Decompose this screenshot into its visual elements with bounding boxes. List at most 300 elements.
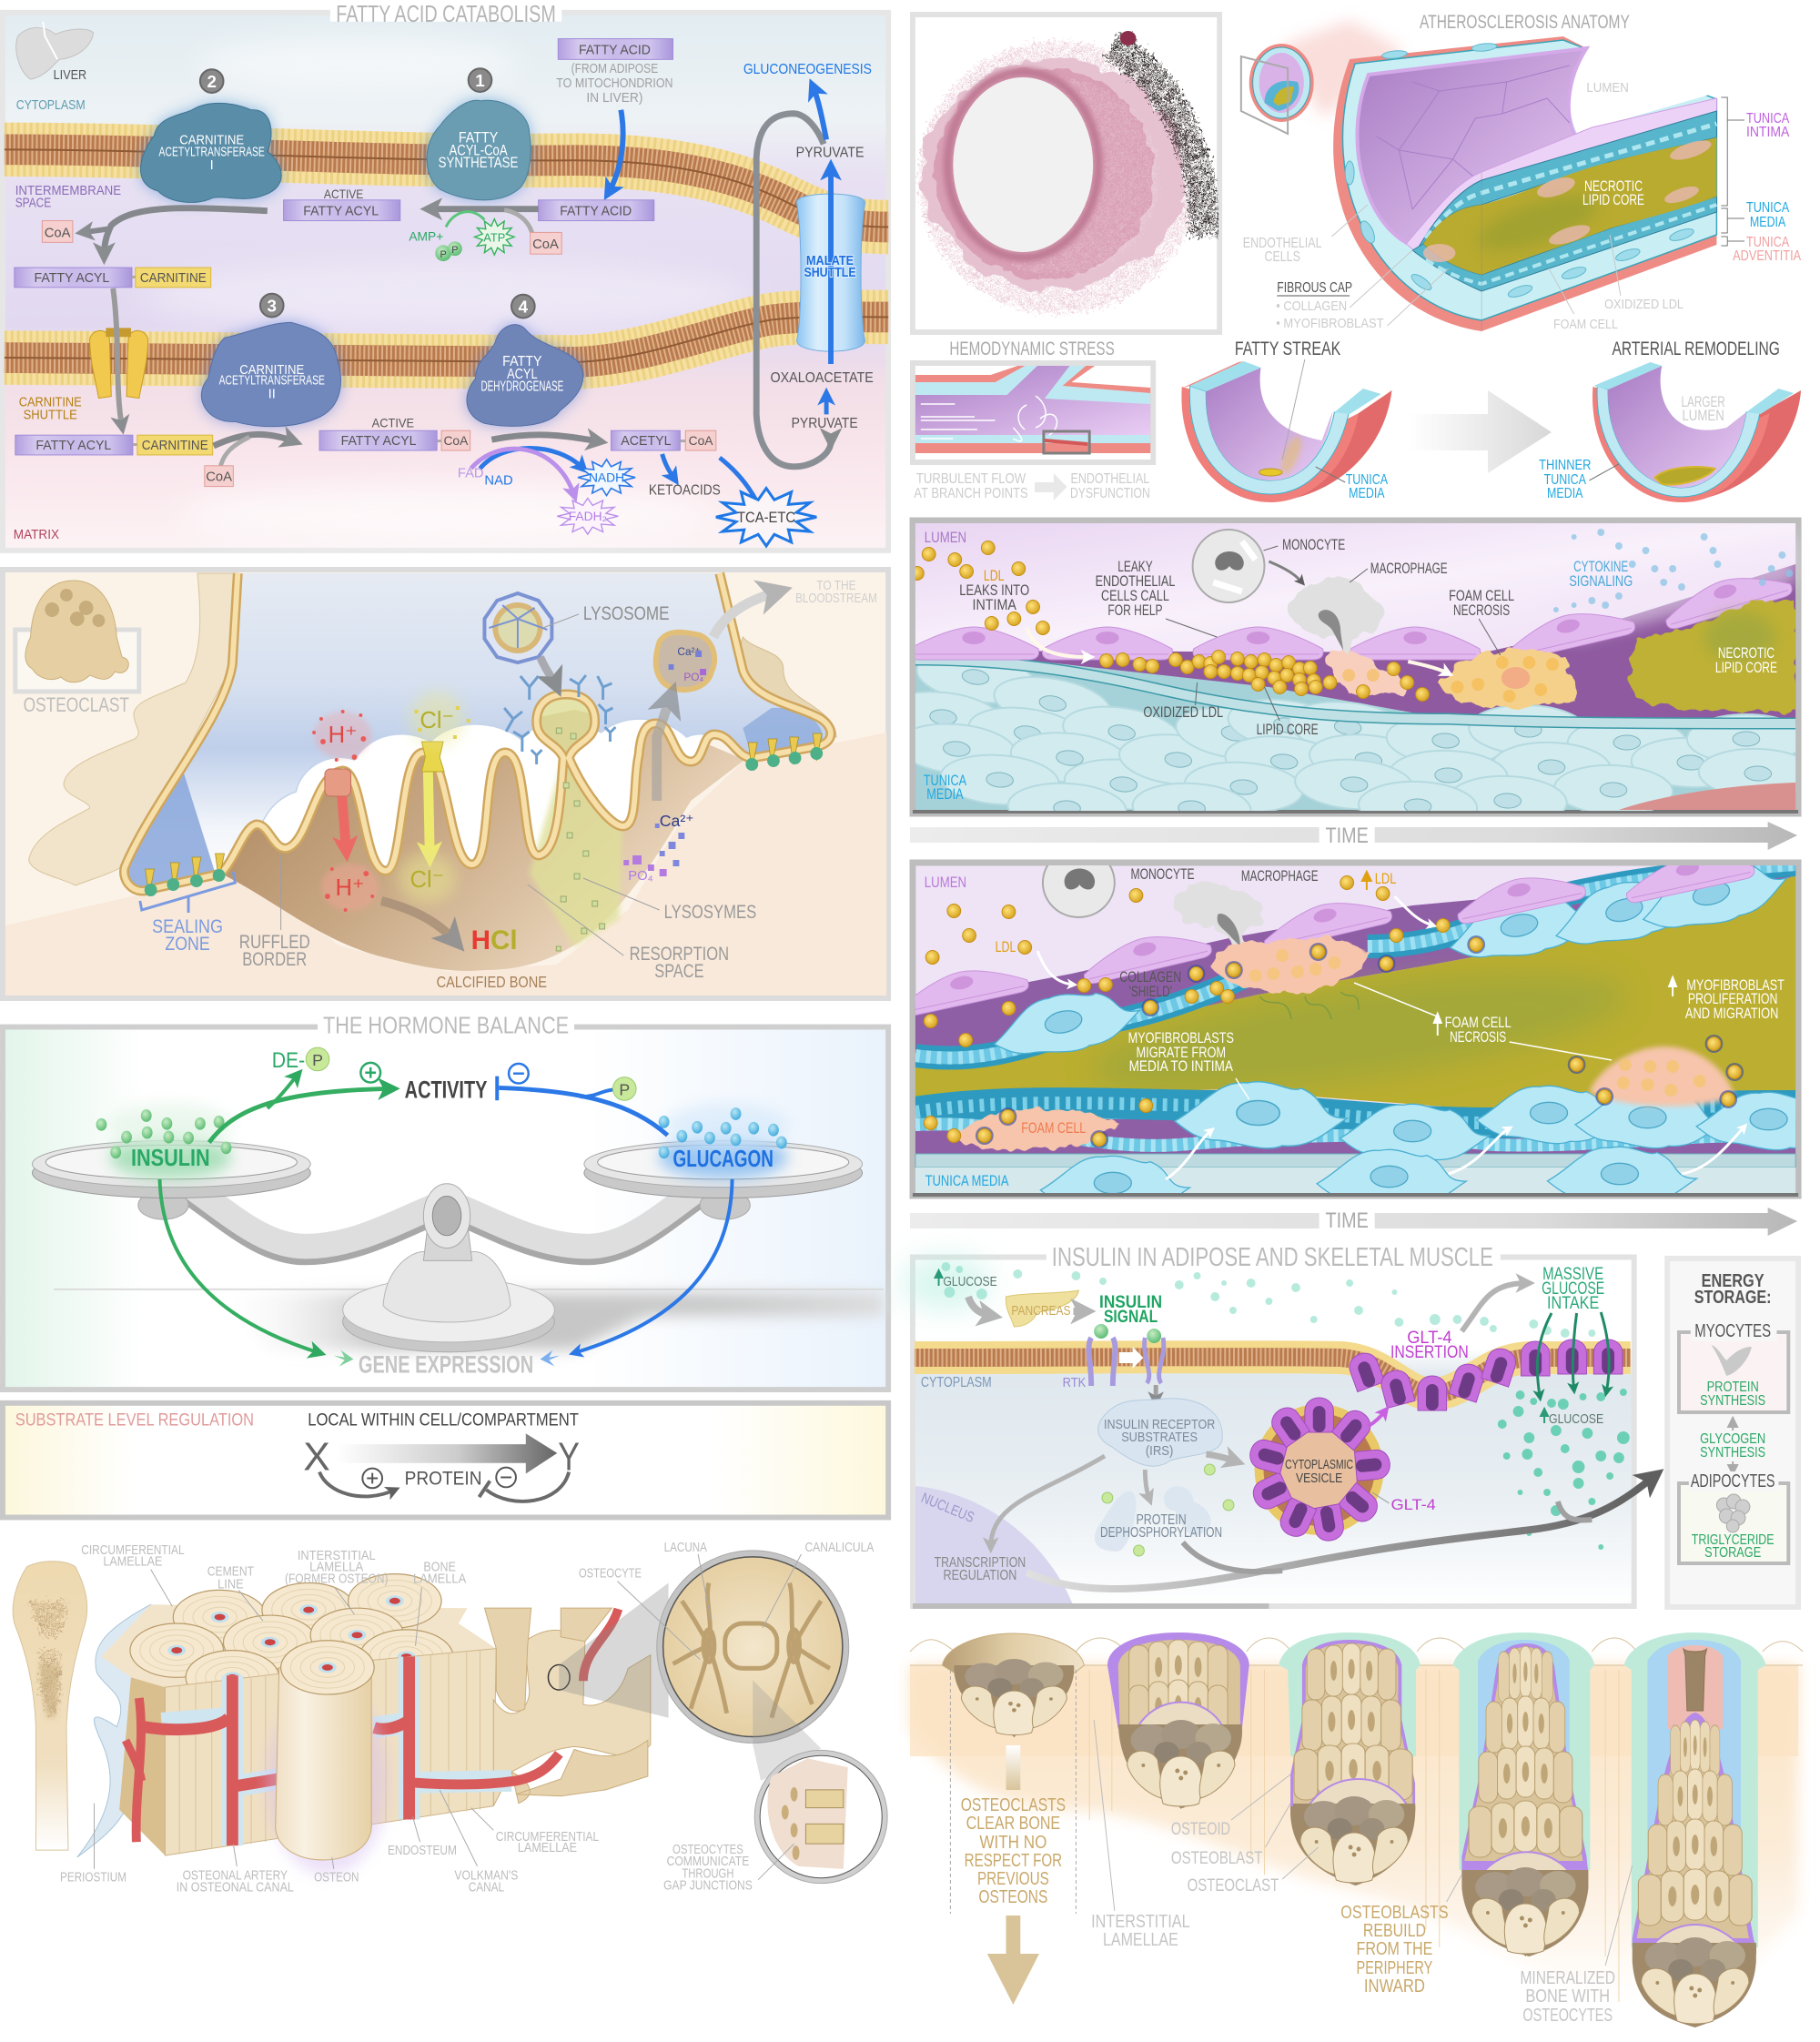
text: osteoclasts clear bone: OSTEONS [978,1887,1047,1907]
burst: FADH2 [557,498,618,534]
enzyme 1: fatty acyl-CoA synthetase: FATTY [459,128,498,146]
label: glycogen synthesis: GLYCOGEN [1700,1431,1765,1447]
foam cell upper [1211,938,1368,1019]
heading: STORAGE: [1694,1288,1772,1308]
number badge 4: 4 [519,297,529,317]
label: tunica media [1746,200,1790,230]
labels: INTIMA [973,596,1016,613]
blue arc to gene expression [574,1179,733,1353]
column 2 [1107,1633,1249,1809]
ion cloud: Cl- upper: Cl⁻ [420,708,454,733]
label: thinner tunica media: TUNICA [1544,472,1586,488]
enzyme 2: carnitine acetyltransferase I [140,103,281,202]
box: active fatty acyl: FATTY ACYL [303,205,379,219]
label: glucagon: GLUCAGON [673,1147,774,1172]
lumen [1357,48,1586,246]
fibrous cap band upper [1415,111,1716,253]
left column [3,2,888,1895]
labels: MEDIA TO INTIMA [1129,1057,1234,1075]
ions: calcium and phosphate in pit: Ca²⁺ [660,812,694,830]
labels: MACROPHAGE [1241,867,1319,885]
label: glt-4 insertion [1390,1328,1469,1361]
bone labels: CANAL [469,1881,504,1895]
panel: fatty acid catabolism [3,2,888,551]
letters X Y: Y [558,1436,580,1480]
arrow: coa branch [221,437,249,466]
labels: OXIDIZED LDL [1143,703,1223,721]
carnitine shuttle channel [90,328,148,399]
label: transcription regulation [935,1555,1026,1583]
ion cloud: H+ upper [312,710,371,762]
media layer [915,1168,1795,1193]
box: active fatty acyl [284,187,400,221]
phosphate small icons [1102,1464,1234,1556]
text: osteoblasts rebuild: INWARD [1364,1976,1425,1997]
labels: LDL [996,938,1016,955]
arrow: time 2: TIME [1326,1208,1369,1233]
arrow through shuttle [113,288,122,427]
bone labels: CANALICULA [804,1541,874,1555]
endothelial cell outlines [1377,66,1570,209]
IRS blob: (IRS) [1146,1444,1173,1459]
feedback curves [319,1472,569,1501]
label: larger lumen [1681,393,1725,424]
labels: LIPID CORE [1257,721,1319,738]
label: tunica intima: INTIMA [1746,125,1790,140]
bone labels: GAP JUNCTIONS [663,1879,753,1894]
metabolite labels: PYRUVATE [792,416,858,431]
label: tunica media: TUNICA [1746,200,1790,216]
membrane [915,1357,1631,1394]
proton transport arrows and channels [325,769,351,852]
box: acetyl coa: CoA [689,433,713,448]
label: massive glucose intake [1542,1264,1604,1312]
vessel diagram [915,366,1150,453]
label: mineralized bone: MINERALIZED [1520,1968,1615,1988]
inhibition line from glucagon [497,1077,668,1136]
label: protein dephosphorylation [1100,1512,1222,1541]
burst: TCA-ETC [716,489,816,546]
text: osteoclasts clear bone: CLEAR BONE [966,1814,1060,1834]
panel: hemodynamic stress [913,339,1153,501]
text: osteoblasts rebuild: PERIPHERY [1357,1958,1432,1978]
icon: plus [360,1063,380,1083]
label: transcription regulation: TRANSCRIPTION [935,1555,1026,1571]
bone labels: (FORMER OSTEON) [285,1572,388,1586]
glucose dots top [942,1262,1595,1338]
label: tunica intima [1746,111,1790,140]
label: tunica media [1346,472,1388,501]
note: from adipose [556,62,673,106]
labels: osteoid osteoblast osteoclast: OSTEOID [1171,1819,1230,1838]
label: protein dephosphorylation: DEPHOSPHORYLATION [1100,1525,1222,1541]
labels: osteoid osteoblast osteoclast: OSTEOBLAST [1171,1848,1263,1867]
ion cloud: H+ lower: H⁺ [336,875,365,901]
IRS blob [1098,1399,1222,1466]
blue arrow pyruvate to oxaloacetate [824,395,829,414]
adipocytes box: TRIGLYCERIDE [1692,1532,1774,1548]
arrow: monocyte to macrophage [1269,561,1302,582]
block left face [119,1677,165,1855]
label: endothelial dysfunction: ENDOTHELIAL [1070,471,1149,487]
note: from adipose: IN LIVER) [586,91,643,106]
bone labels: IN OSTEONAL CANAL [177,1881,294,1895]
label: sealing zone: SEALING [152,916,223,937]
label: glucose lower: GLUCOSE [1549,1412,1603,1427]
label: sealing zone: ZONE [165,934,210,955]
label: resorption space: SPACE [654,961,704,982]
resorption pit [221,710,744,971]
artery half section [1181,361,1391,502]
inset: osteoclast cell [15,581,139,692]
panel: fatty streak [1181,339,1391,502]
compartment label: intermembrane space: SPACE [15,197,51,211]
arrow glucose to pancreas [968,1297,993,1316]
labels: LEAKS INTO [959,581,1029,599]
metabolite labels: OXALOACETATE [770,370,874,386]
label: interstitial lamellae: LAMELLAE [1103,1930,1178,1950]
column 4 blue lamella [1478,1640,1570,1856]
column 4 lamella [1453,1633,1594,1870]
title: ATHEROSCLEROSIS ANATOMY [1420,12,1630,33]
block top face [101,1604,496,1687]
labels: MYOFIBROBLAST [1686,976,1785,994]
osteoclast cell interior [124,573,831,891]
labels: AND MIGRATION [1685,1005,1778,1022]
label: ruffled border: BORDER [242,949,307,970]
label: mineralized bone: OSTEOCYTES [1522,2006,1613,2026]
glucose dots cytoplasm [1498,1389,1630,1550]
title: THE HORMONE BALANCE [323,1013,569,1038]
label: tunica media: MEDIA [1750,215,1786,230]
panel: LDL advanced stage [910,859,1802,1199]
icon: pancreas [1006,1290,1078,1327]
icon: pancreas: PANCREAS [1011,1304,1071,1319]
label: interstitial lamellae: INTERSTITIAL [1091,1912,1190,1932]
text: osteoclasts clear bone: WITH NO [979,1833,1046,1853]
column 4 [1461,1643,1588,1956]
bone labels: PERIOSTIUM [60,1871,126,1885]
white cytoplasm bumps [262,719,704,852]
ion cloud: H+ lower [321,864,379,912]
labels: LIPID CORE [1715,659,1777,676]
box: active fatty acyl coa [319,415,470,450]
branch arrows joining [1183,1501,1592,1572]
number badge 3 [260,294,284,317]
labels: MONOCYTE [1131,865,1195,883]
lamellae vertical lines [179,1651,480,1853]
label: insulin signal [1099,1292,1162,1326]
labels: FOR HELP [1107,601,1163,619]
number badge 4 [511,295,535,318]
ATP burst and green arrow: P [440,249,447,260]
compartment label: intermembrane space: INTERMEMBRANE [15,184,121,198]
label: glt-4: GLT-4 [1390,1496,1436,1513]
number badge 3: 3 [268,297,277,316]
inner mitochondrial membrane [5,317,888,362]
burst: NADH [578,460,635,495]
label: ruffled border: RUFFLED [239,932,310,953]
enzyme 2: carnitine acetyltransferase I: CARNITINE [179,133,244,147]
labels [924,529,1777,803]
title: INSULIN IN ADIPOSE AND SKELETAL MUSCLE [1052,1243,1493,1272]
right column [882,12,1820,2027]
panel: insulin in adipose and skeletal muscle [901,1243,1654,1606]
foam cell necrosis [1440,648,1579,708]
arrow vesicle to membrane [1369,1410,1386,1426]
gray arrow resorption to vesicle [657,695,672,801]
column 5 lamella [1624,1633,1766,1947]
adipocytes box [1679,1471,1788,1563]
big arrow down [987,1916,1039,2005]
text: osteoblasts rebuild: OSTEOBLASTS [1340,1903,1449,1923]
green arc to gene expression [160,1179,319,1353]
arrow: time 1: TIME [1326,824,1369,848]
ruffled border membrane [124,573,831,891]
enzyme 3: carnitine acetyltransferase II: CARNITINE [239,363,304,378]
sealing integrins [145,733,823,896]
number badge 1: 1 [475,71,485,90]
label: sealing zone [152,916,223,955]
enzyme 4: fatty acyl dehydrogenase [467,325,583,426]
label: rtk: RTK [1063,1376,1086,1390]
column 3 [1290,1640,1415,1885]
pink adventitia corner [1619,783,1795,810]
column 1: osteoclasts clearing bone [942,1633,1084,1737]
foam cell [1329,650,1405,696]
label: larger lumen: LARGER [1681,393,1725,410]
labels: CYTOKINE [1573,558,1628,575]
label: tunica adventitia [1733,235,1801,264]
box: fatty acid [539,200,654,221]
bone labels: COMMUNICATE [667,1855,749,1869]
artery cross section [918,31,1204,314]
arrow down fading [1006,1745,1020,1790]
label: turbulent flow: AT BRANCH POINTS [914,486,1028,501]
compartment label: cytoplasm: CYTOPLASM [16,98,86,113]
icon: minus [509,1064,529,1084]
gray arrow loop to gluconeogenesis [756,114,831,467]
panel: the hormone balance [3,1013,888,1390]
elastic lamina [915,660,1795,723]
bone labels: OSTEONAL ARTERY [183,1869,288,1884]
right spongy bone [493,1630,651,1806]
label: calcified bone: CALCIFIED BONE [437,973,547,991]
arrow insertion to massive intake [1461,1283,1527,1331]
calcified bone [5,733,886,996]
boxes: fatty acyl carnitine lower: CARNITINE [142,439,208,453]
label: insulin: INSULIN [131,1146,210,1171]
labels: MACROPHAGE [1370,560,1448,577]
label: turbulent flow [914,471,1028,501]
label: fibrous cap: • MYOFIBROBLAST [1276,317,1384,331]
blue arrow to gluconeogenesis [813,86,826,139]
antibodies near vesicle [504,675,615,764]
bone labels: LINE [217,1577,244,1592]
malate shuttle [797,167,865,364]
labels: osteoid osteoblast osteoclast [1171,1819,1279,1895]
box: active fatty acyl coa: FATTY ACYL [341,434,417,449]
bone labels: INTERSTITIAL [298,1549,376,1563]
panel: energy storage [1667,1259,1798,1607]
metabolite labels: KETOACIDS [649,482,721,499]
ions: calcium and phosphate in pit: PO₄ [628,869,653,884]
label: cytoplasm: CYTOPLASM [921,1375,992,1390]
white notch above wall [1569,48,1722,136]
green arrows up [209,1075,391,1142]
vesicle with ca and po4: PO₄ [683,671,703,683]
label: de-phosphorylated: DE- [272,1049,305,1073]
title: FATTY ACID CATABOLISM [336,2,556,27]
panel: osteoclast [3,570,888,998]
bone labels [60,1541,874,1895]
glucose mist top left [901,1256,991,1310]
label: necrotic lipid core: LIPID CORE [1582,191,1644,208]
labels: LUMEN [925,529,966,546]
label: carnitine shuttle [19,395,82,422]
membrane glut-4 channels [1346,1339,1623,1410]
ion cloud: Cl- upper [410,692,470,746]
labels: MYOFIBROBLASTS [1128,1029,1234,1046]
number badge 2: 2 [207,72,217,91]
box: coa released [42,221,73,242]
tunica media cut [1342,40,1716,320]
spongy bone texture [29,1601,68,1718]
scale beam [176,1177,716,1250]
arrow: fatty acyl to coa and carnitine [104,208,268,256]
panel: atherosclerosis anatomy [1241,12,1801,332]
labels: TUNICA MEDIA [925,1172,1009,1189]
boxes: fatty acyl carnitine upper [15,268,211,288]
left pan [32,1103,310,1198]
media cells [1345,43,1695,299]
label: tunica intima: TUNICA [1746,111,1790,126]
bone labels: LAMELLA [309,1561,363,1575]
bone labels: LAMELLAE [518,1841,577,1855]
necrotic lipid core [1423,137,1716,275]
block front face [165,1649,496,1855]
box: fatty acid source: FATTY ACID [579,43,651,57]
label: protein: PROTEIN [405,1466,481,1489]
monocyte [1042,865,1116,918]
box: coa: CoA [532,238,559,252]
label: insulin signal: SIGNAL [1104,1307,1158,1326]
small ring marker [548,1664,570,1690]
arrow: coa release [83,228,109,232]
bone labels: OSTEON [314,1871,359,1885]
note: from adipose: (FROM ADIPOSE [571,62,658,76]
elastic lamina [915,1154,1795,1168]
enzyme 3: carnitine acetyltransferase II: II [268,388,276,402]
enzyme 4: fatty acyl dehydrogenase: DEHYDROGENASE [480,379,563,395]
myocytes box: SYNTHESIS [1700,1393,1765,1409]
big gray arrow to energy storage [1026,1476,1654,1589]
small green arrow [334,1350,353,1366]
arrow: to acetyl coa [491,435,600,441]
arrow pancreas to signal [1073,1308,1086,1315]
bone labels: THROUGH [682,1867,734,1882]
boxes: fatty acyl carnitine lower [15,435,213,455]
outer wall adventitia [1333,36,1716,331]
icon: phosphate [612,1077,636,1100]
vertical cut line [1481,173,1482,331]
label: endothelial cells: ENDOTHELIAL [1243,236,1322,251]
bone labels: OSTEOCYTES [672,1843,743,1857]
labels: LEAKY [1117,558,1153,575]
magnified lacuna circle [657,1551,849,1743]
enzyme 4: fatty acyl dehydrogenase: ACYL [507,367,538,382]
artery half section [1592,362,1801,502]
label: de-phosphorylated [272,1047,329,1073]
arrow: carnitine to active fatty acyl coa [214,434,294,446]
number badge 2 [200,69,224,93]
ions: calcium and phosphate in pit [623,812,694,884]
number badge 1 [469,68,491,92]
labels: PROLIFERATION [1688,990,1777,1007]
scale pivot [423,1184,470,1248]
insulin molecules [96,1109,231,1158]
compartment label: matrix: MATRIX [14,528,59,542]
lysosomal particles [556,728,605,951]
myocytes box [1679,1321,1788,1412]
label: foam cell: FOAM CELL [1553,318,1618,332]
letters X Y: X [303,1436,330,1480]
spongy bone pillars [484,1608,648,1804]
enzyme 2: carnitine acetyltransferase I: ACETYLTRANSFERASE [159,145,265,159]
label: massive glucose intake: INTAKE [1547,1293,1599,1312]
vesicle with ca and po4: Ca²⁺ [677,645,701,658]
small vessel overview [1241,20,1403,134]
dashed guide [950,1670,1076,1914]
label: insulin signal: INSULIN [1099,1292,1162,1311]
text: osteoclasts clear bone: PREVIOUS [977,1869,1049,1889]
labels: SIGNALING [1569,572,1633,590]
text: osteoclasts clear bone: RESPECT FOR [965,1851,1062,1871]
adipocytes box: STORAGE [1704,1545,1761,1561]
ATP burst and green arrow [409,212,514,261]
bone labels: VOLKMAN'S [454,1869,519,1884]
labels: TUNICA [924,772,967,789]
endothelial cells [909,563,1794,662]
burst: NADH: NADH [589,470,624,485]
labels: LDL [984,567,1005,584]
fibrous cap band lower [1412,197,1716,291]
icons plus minus [362,1468,516,1488]
heading [1694,1271,1772,1308]
bone labels: CIRCUMFERENTIAL [81,1543,185,1558]
monocyte [1193,530,1264,602]
enzyme 1: fatty acyl-CoA synthetase: SYNTHETASE [439,154,518,171]
label: ruffled border [239,932,310,970]
cytoplasmic vesicle: CYTOPLASMIC [1285,1458,1353,1472]
bone labels: BONE [423,1561,456,1575]
box: active fatty acyl coa: CoA [443,433,469,448]
arrow to IRS [1154,1385,1158,1401]
boxes: fatty acyl carnitine upper: FATTY ACYL [34,271,109,286]
label: de-phosphorylated: P [312,1051,323,1069]
white arrows [1026,628,1449,673]
labels: FAD NAD: NAD [484,474,513,489]
fatty streak lesion [1259,359,1305,476]
label: gene expression: GENE EXPRESSION [359,1350,533,1378]
intima purple [915,564,1795,719]
collagen band upper [915,864,1795,1058]
label: lysosome: LYSOSOME [583,603,670,624]
label: glt-4 insertion: GLT-4 [1407,1328,1452,1347]
box: fatty acid source [558,39,673,59]
big arrow: fatty streak to remodeling [1409,390,1552,473]
intima layer [1406,98,1716,253]
